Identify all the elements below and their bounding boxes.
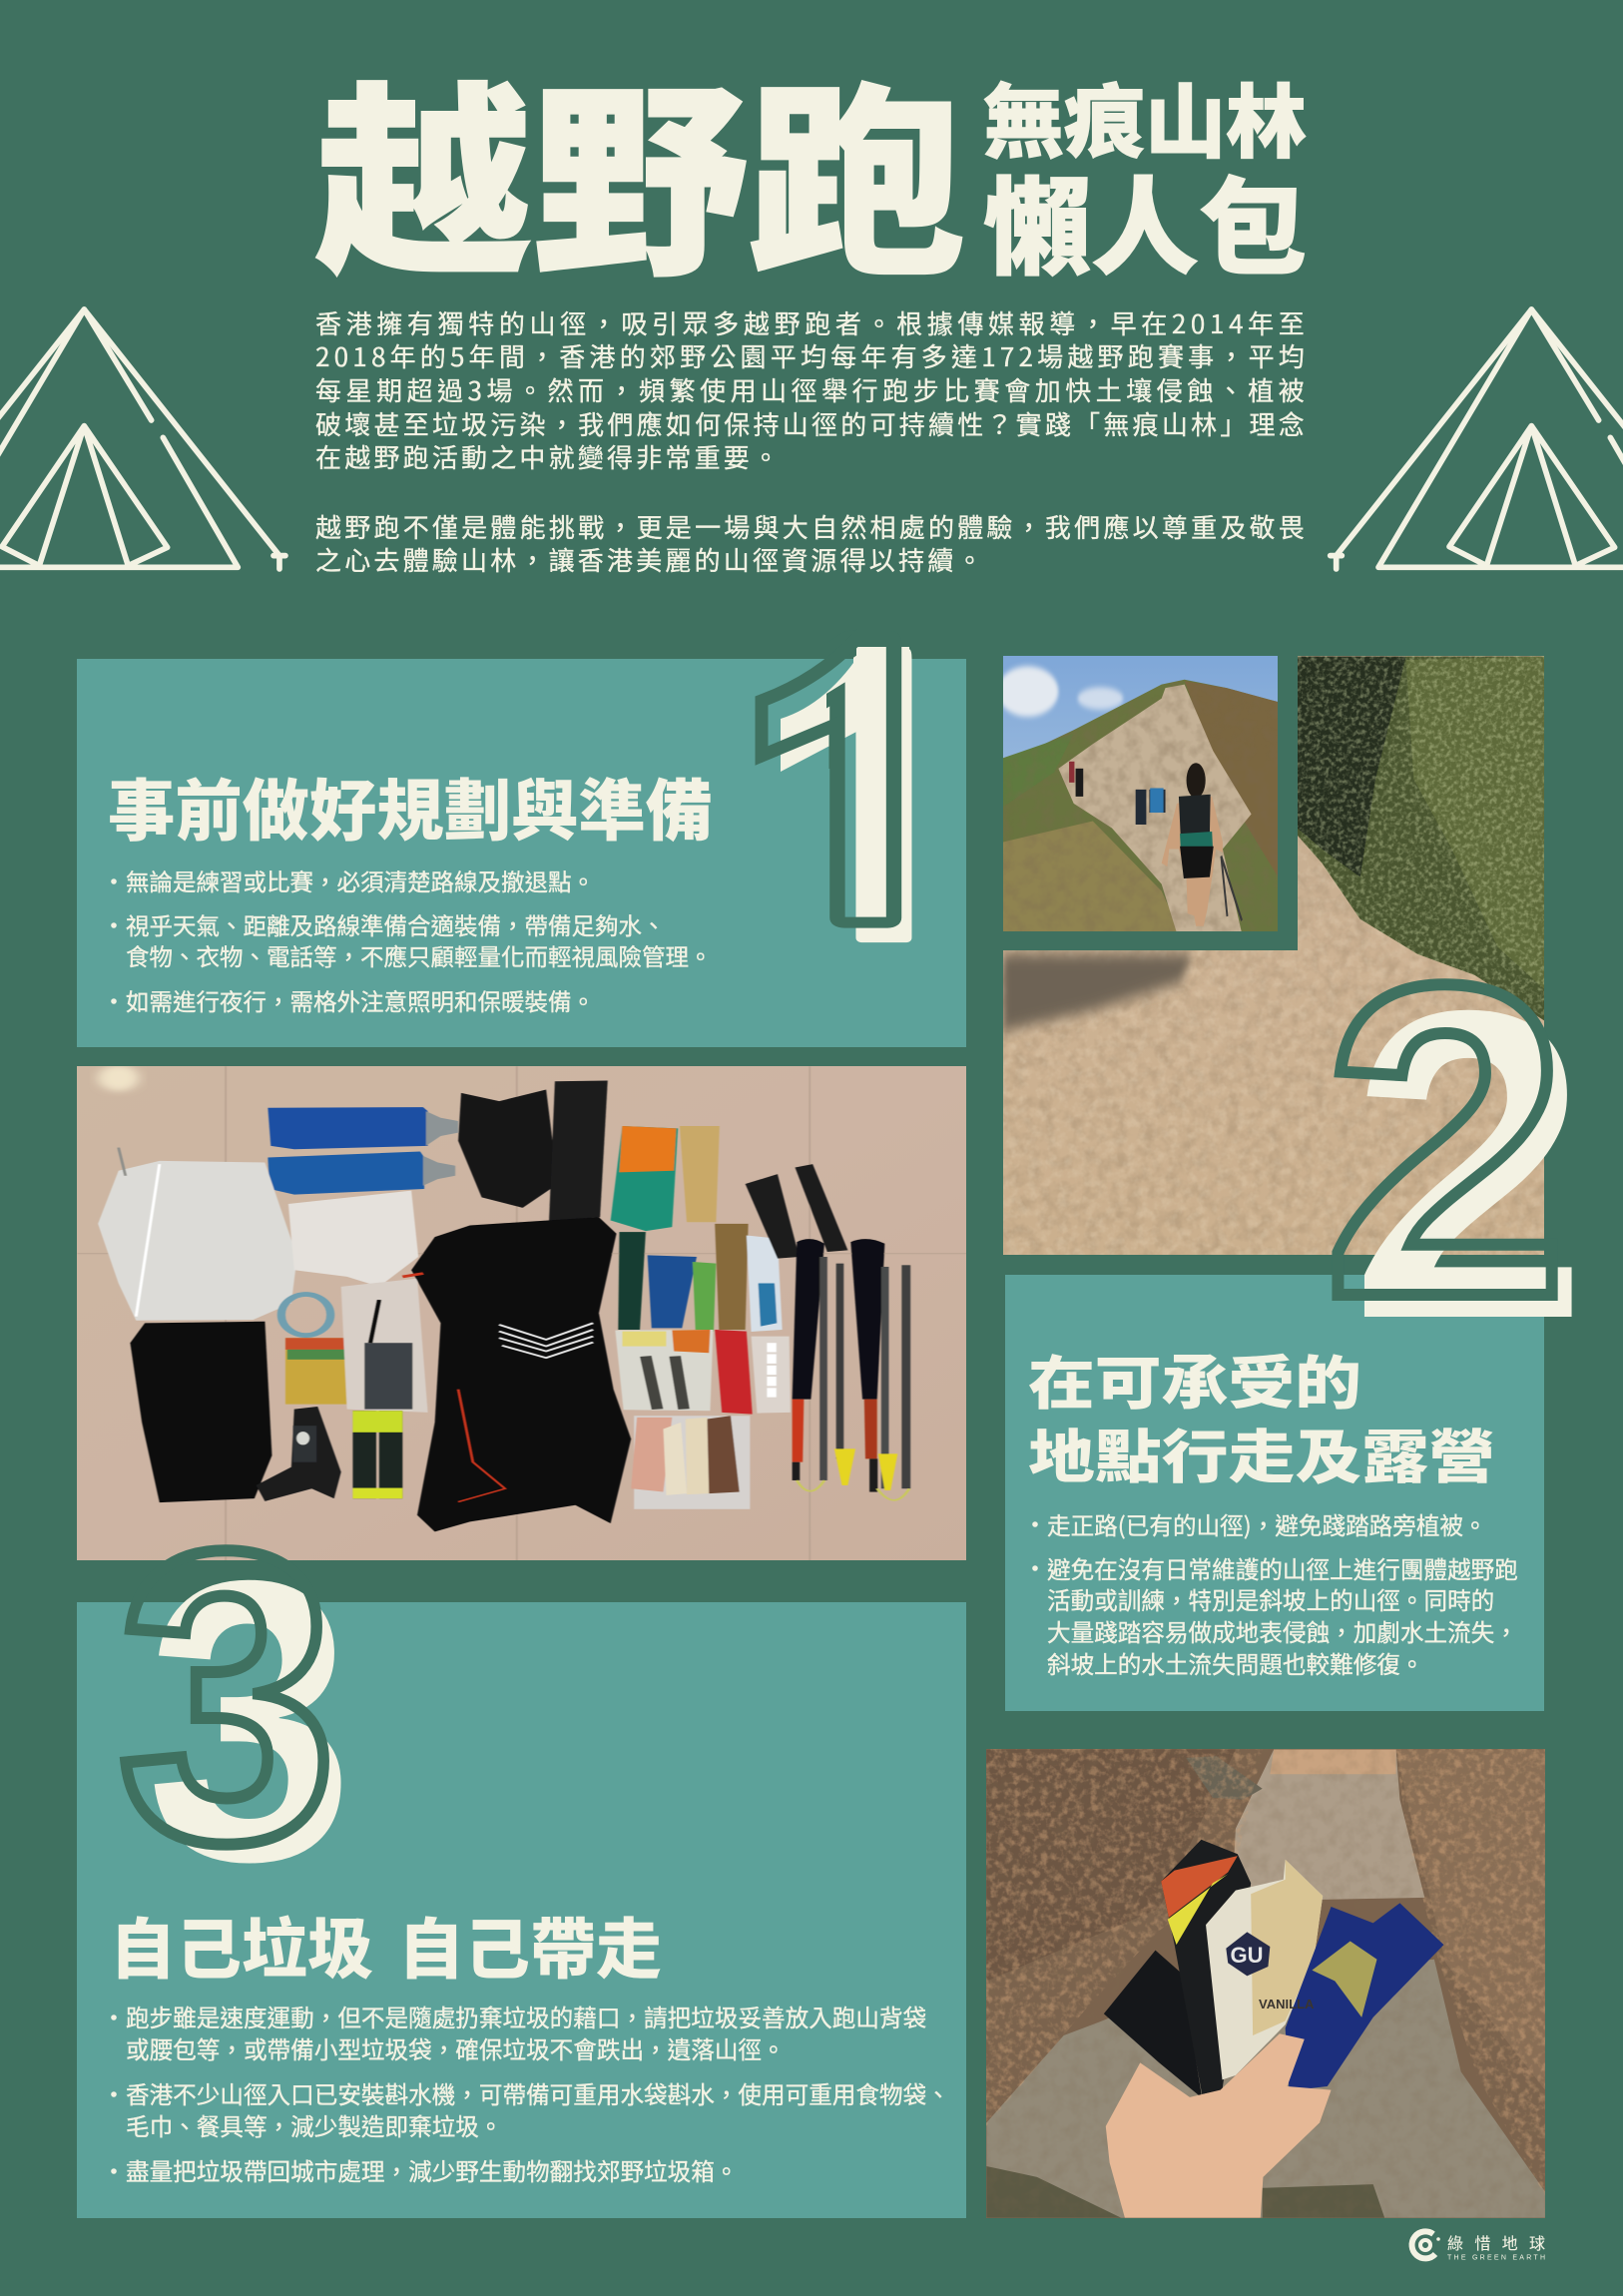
trousers [130, 1322, 271, 1502]
number 1 [755, 647, 912, 942]
bullets: 毛巾、餐具等，減少製造即棄垃圾。 [126, 2108, 503, 2142]
intro text [315, 304, 1308, 578]
snack bars [715, 1224, 749, 1330]
intro text: 在越野跑活動之中就變得非常重要。 [315, 438, 782, 475]
title [315, 19, 1307, 316]
card pouch [285, 1338, 355, 1405]
panel 2 text [1028, 1337, 1518, 1680]
energy sticks [352, 1411, 376, 1498]
panel: step 3 background [77, 1602, 966, 2218]
phone bag [341, 1279, 428, 1413]
ziplock with towel [288, 1191, 418, 1287]
intro text: 每星期超過3場。然而，頻繁使用山徑舉行跑步比賽會加快土壤侵蝕、植被 [315, 371, 1308, 408]
sunscreen [680, 1126, 720, 1222]
vest [411, 1217, 631, 1531]
bullets: 走正路(已有的山徑)，避免踐踏路旁植被。 [1047, 1507, 1487, 1541]
number 1: 1 [694, 604, 1014, 978]
main title: 越野跑 [315, 19, 965, 316]
intro text: 之心去體驗山林，讓香港美麗的山徑資源得以持續。 [315, 541, 986, 578]
panel 3 text [110, 1897, 950, 2187]
heading: plan and prepare: 事前做好規劃與準備 [108, 758, 713, 855]
intro text: 越野跑不僅是體能挑戰，更是一場與大自然相處的體驗，我們應以尊重及敬畏 [315, 508, 1308, 545]
photo: flat lay of trail running gear [77, 1065, 968, 1561]
intro text: 破壞甚至垃圾污染，我們應如何保持山徑的可持續性？實踐「無痕山林」理念 [315, 405, 1308, 442]
panel: step 1 background [77, 659, 966, 1047]
bullets: 大量踐踏容易做成地表侵蝕，加劇水土流失， [1047, 1614, 1518, 1648]
number 3: 3 [146, 1498, 354, 1945]
logo wordmark: 綠惜地球 [1447, 2230, 1545, 2254]
red gel [715, 1330, 753, 1415]
trekking poles [793, 1239, 824, 1400]
bullets: 無論是練習或比賽，必須清楚路線及撤退點。 [126, 863, 595, 897]
subtitle line 1: 無痕山林 [983, 59, 1307, 175]
bullets [1032, 1507, 1518, 1680]
wrapper brand text: GU [1230, 1943, 1264, 1968]
bullets: 香港不少山徑入口已安裝斟水機，可帶備可重用水袋斟水，使用可重用食物袋、 [126, 2076, 950, 2110]
wrappers [1104, 1951, 1202, 2098]
bullets: 活動或訓練，特別是斜坡上的山徑。同時的 [1047, 1582, 1494, 1616]
intro text: 2018年的5年間，香港的郊野公園平均每年有多達172場越野跑賽事，平均 [315, 337, 1308, 374]
photo: hand holding gel wrappers on trail [986, 1749, 1545, 2218]
bullets: 食物、衣物、電話等，不應只顧輕量化而輕視風險管理。 [126, 938, 713, 972]
bullets: 盡量把垃圾帶回城市處理，減少野生動物翻找郊野垃圾箱。 [126, 2153, 738, 2187]
heading: walk and camp in tolerant places: 在可承受的 [1028, 1337, 1361, 1421]
logo mark [1412, 2231, 1440, 2258]
icon: right tent [1331, 309, 1623, 569]
bullets [111, 2000, 950, 2187]
headband [618, 1232, 646, 1330]
visor [458, 1090, 558, 1208]
panel 2 text: 地點行走及露營 [1028, 1411, 1495, 1494]
wrist straps [746, 1174, 800, 1259]
logo [1412, 2230, 1545, 2262]
bullets: 斜坡上的水土流失問題也較難修復。 [1047, 1646, 1423, 1680]
bullets: 如需進行夜行，需格外注意照明和保暖裝備。 [126, 983, 595, 1017]
panel 1 text [108, 758, 713, 1017]
bullets: 或腰包等，或帶備小型垃圾袋，確保垃圾不會跌出，遺落山徑。 [126, 2031, 786, 2065]
bullets: 跑步雖是速度運動，但不是隨處扔棄垃圾的藉口，請把垃圾妥善放入跑山背袋 [126, 2000, 926, 2033]
bullets: 避免在沒有日常維護的山徑上進行團體越野跑 [1047, 1551, 1518, 1585]
headlamp [257, 1407, 341, 1501]
number 2: 2 [1323, 893, 1569, 1390]
subtitle line 2: 懶人包 [983, 143, 1307, 296]
tablets tube [693, 1262, 716, 1332]
runner [1162, 797, 1223, 926]
wrapper flavour text: VANILLA [1259, 1997, 1315, 2011]
icon: left tent [0, 309, 285, 569]
bullets: 視乎天氣、距離及路線準備合適裝備，帶備足夠水、 [126, 907, 665, 941]
bottles [268, 1107, 428, 1149]
photo: runners on hill trail [997, 656, 1278, 933]
intro text: 香港擁有獨特的山徑，吸引眾多越野跑者。根據傳媒報導，早在2014年至 [315, 304, 1308, 341]
cup [648, 1255, 697, 1328]
heading: carry your own rubbish: 自己垃圾 [110, 1897, 373, 1993]
hammer gels [615, 1330, 713, 1411]
other runners [1136, 790, 1166, 825]
arm sleeve [549, 1081, 608, 1221]
jacket [98, 1161, 297, 1321]
GU gels [634, 1416, 750, 1509]
watch [281, 1295, 330, 1336]
number 2: 2 [1350, 920, 1589, 1411]
number 1: 1 [714, 615, 1030, 999]
logo: THE GREEN EARTH [1447, 2254, 1545, 2262]
hand [1106, 2033, 1332, 2218]
photo: sandy eroded trail with forest [1003, 656, 1544, 1255]
number 3: 3 [117, 1466, 338, 1929]
salt tablets bag [752, 1337, 791, 1414]
socks [611, 1126, 678, 1231]
bullets [111, 863, 712, 1017]
heading: carry your own rubbish: 自己帶走 [398, 1897, 662, 1993]
panel: step 2 background [1005, 1275, 1544, 1711]
